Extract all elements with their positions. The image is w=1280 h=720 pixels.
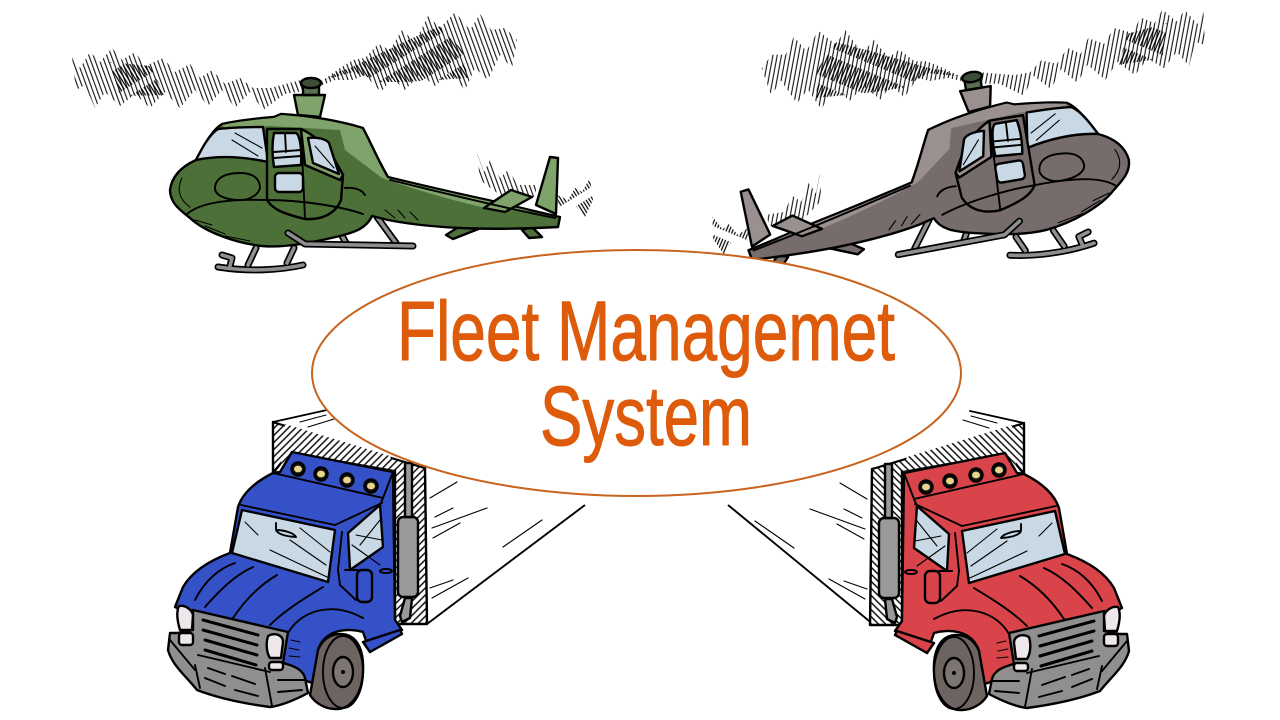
title: line 1: Fleet Managemet: [397, 284, 895, 378]
illustration: grey helicopter: [682, 0, 1239, 308]
truck trailer lower edge: right: [728, 505, 874, 625]
illustration: blue truck: [168, 410, 542, 709]
title: line 2: System: [540, 369, 752, 463]
illustration: red truck: [755, 411, 1129, 710]
title ellipse: [312, 250, 961, 496]
truck trailer lower edge: left: [427, 505, 585, 624]
illustration: green helicopter: [72, 12, 593, 270]
